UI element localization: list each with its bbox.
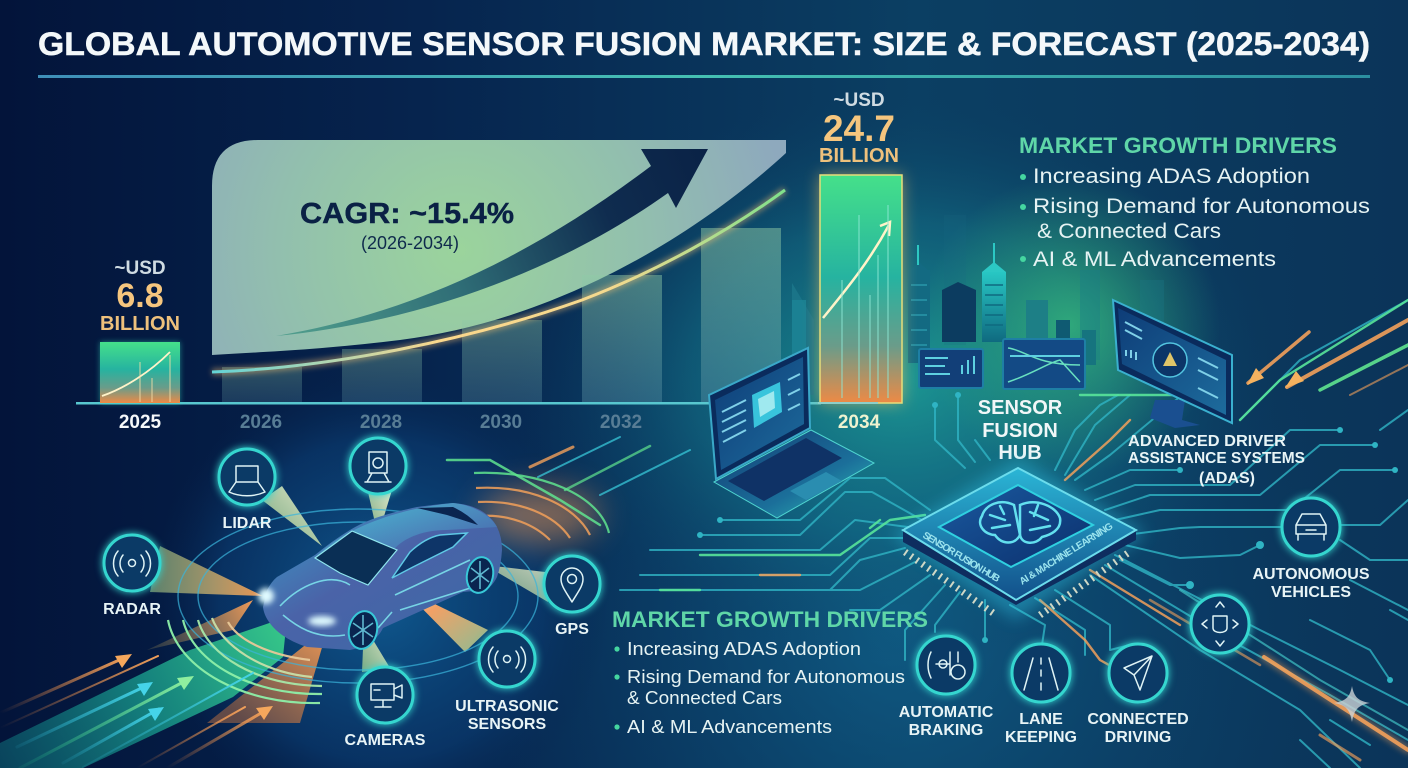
icon: gps — [544, 556, 600, 612]
text block: market growth drivers lower: MARKET GROWTH DRIVERS — [612, 607, 928, 632]
icon: radar — [104, 535, 160, 591]
label: USD 24.7 billion: BILLION — [819, 145, 899, 167]
text block: market growth drivers upper: MARKET GROWTH DRIVERS — [1019, 133, 1337, 158]
icon: ultrasonic — [479, 631, 535, 687]
label: USD 24.7 billion: 24.7 — [823, 108, 895, 149]
chip text right: AI & MACHINE LEARNING — [1018, 521, 1115, 588]
streaks: lower right — [1150, 590, 1408, 760]
label: autonomous vehicles: VEHICLES — [1271, 584, 1351, 601]
laptop — [709, 348, 874, 518]
label: connected driving: DRIVING — [1105, 729, 1171, 746]
ADAS label: ASSISTANCE SYSTEMS — [1128, 450, 1305, 467]
year axis labels: 2034 — [838, 412, 881, 433]
car — [258, 503, 502, 651]
label: automatic braking — [899, 704, 994, 739]
text block: market growth drivers lower: Increasing ADAS Adoption — [627, 639, 861, 659]
text block: market growth drivers upper — [1019, 133, 1370, 271]
icon: autonomous vehicles — [1282, 498, 1340, 556]
sensor fusion hub label: HUB — [998, 442, 1042, 464]
streak arrows: lower left — [0, 654, 273, 768]
text block: market growth drivers upper: Rising Demand for Autonomous — [1033, 195, 1370, 218]
label: automatic braking: AUTOMATIC — [899, 704, 994, 721]
icon: sensor top — [350, 438, 406, 494]
label: lane keeping: KEEPING — [1005, 729, 1077, 746]
year axis labels: 2032 — [600, 412, 642, 433]
signal rings around car — [178, 509, 538, 683]
signal arcs: upper right — [474, 473, 609, 540]
icon: cameras — [357, 667, 413, 723]
label: connected driving — [1087, 711, 1189, 746]
text block: market growth drivers lower: & Connected Cars — [627, 688, 782, 708]
bar chart: market size 2025 to 2034 — [76, 90, 902, 433]
text block: market growth drivers lower: Rising Demand for Autonomous — [627, 667, 905, 687]
glow: behind car rear — [480, 487, 600, 543]
headlights — [258, 588, 336, 626]
icon: lidar — [219, 449, 275, 505]
chip: AI and machine learning — [893, 458, 1146, 620]
CAGR period: (2026-2034) — [361, 233, 459, 253]
monitors: dashboards — [919, 339, 1085, 389]
ADAS label — [1128, 433, 1305, 487]
circuit traces — [620, 300, 1408, 768]
city skyline — [792, 215, 1164, 395]
label: USD 24.7 billion — [819, 90, 899, 167]
icon: lane keeping — [1012, 644, 1070, 702]
text block: market growth drivers lower: AI & ML Advancements — [627, 717, 832, 737]
year axis labels: 2028 — [360, 412, 402, 433]
label: connected driving: CONNECTED — [1087, 711, 1189, 728]
icon: brain — [980, 502, 1060, 543]
ADAS label: ADVANCED DRIVER — [1128, 433, 1286, 450]
label: USD 6.8 billion — [100, 258, 180, 335]
streak lines: right of car — [447, 437, 690, 525]
axis baseline — [76, 402, 821, 404]
sensor fusion hub label: SENSOR — [978, 397, 1063, 419]
label: ultrasonic sensors: SENSORS — [468, 716, 546, 733]
year axis labels: 2026 — [240, 412, 282, 433]
label: gps: GPS — [555, 621, 589, 638]
bar 2034 — [818, 175, 902, 404]
ADAS label: (ADAS) — [1199, 470, 1255, 487]
signal arcs: lower left — [168, 618, 322, 703]
year axis labels: 2030 — [480, 412, 522, 433]
CAGR value: CAGR: ~15.4% — [300, 198, 514, 230]
icon: steering control — [1191, 595, 1249, 653]
beams: sensor to car — [0, 486, 548, 768]
bar 2025 — [100, 342, 180, 403]
monitor: ADAS display — [1113, 300, 1232, 428]
text block: market growth drivers lower — [612, 607, 928, 737]
label: USD 6.8 billion: 6.8 — [116, 277, 164, 315]
label: cameras: CAMERAS — [345, 732, 426, 749]
icon: connected driving — [1109, 644, 1167, 702]
label: ultrasonic sensors — [455, 698, 559, 733]
sensor fusion hub label — [978, 397, 1063, 464]
growth curve — [212, 190, 785, 372]
CAGR panel — [212, 140, 786, 355]
label: autonomous vehicles: AUTONOMOUS — [1252, 566, 1370, 583]
year axis labels — [119, 412, 881, 433]
icon: automatic braking — [917, 636, 975, 694]
label: lane keeping — [1005, 711, 1077, 746]
sensor fusion hub label: FUSION — [982, 420, 1058, 442]
text block: market growth drivers upper: AI & ML Advancements — [1033, 248, 1276, 271]
label: USD 6.8 billion: ~USD — [114, 258, 166, 279]
year axis labels: 2025 — [119, 412, 162, 433]
text block: market growth drivers upper: Increasing ADAS Adoption — [1033, 165, 1310, 188]
front wheel — [345, 609, 381, 651]
streak arrows: upper right — [1247, 320, 1408, 395]
label: USD 6.8 billion: BILLION — [100, 313, 180, 335]
text block: market growth drivers upper: & Connected Cars — [1037, 220, 1221, 243]
label: autonomous vehicles — [1252, 566, 1370, 601]
label: automatic braking: BRAKING — [909, 722, 983, 739]
label: radar: RADAR — [103, 601, 161, 618]
chip text left: SENSOR FUSION HUB — [920, 530, 1002, 585]
title: GLOBAL AUTOMOTIVE SENSOR FUSION MARKET: SIZE & FORECAST (2025-2034) — [38, 26, 1370, 62]
label: lidar: LIDAR — [223, 515, 272, 532]
label: USD 24.7 billion: ~USD — [833, 90, 885, 111]
label: ultrasonic sensors: ULTRASONIC — [455, 698, 559, 715]
CAGR growth arrow — [276, 149, 708, 336]
icon: sparkle watermark — [1334, 686, 1370, 722]
rear wheel — [464, 555, 496, 595]
label: lane keeping: LANE — [1019, 711, 1063, 728]
forecast bars — [222, 228, 781, 403]
